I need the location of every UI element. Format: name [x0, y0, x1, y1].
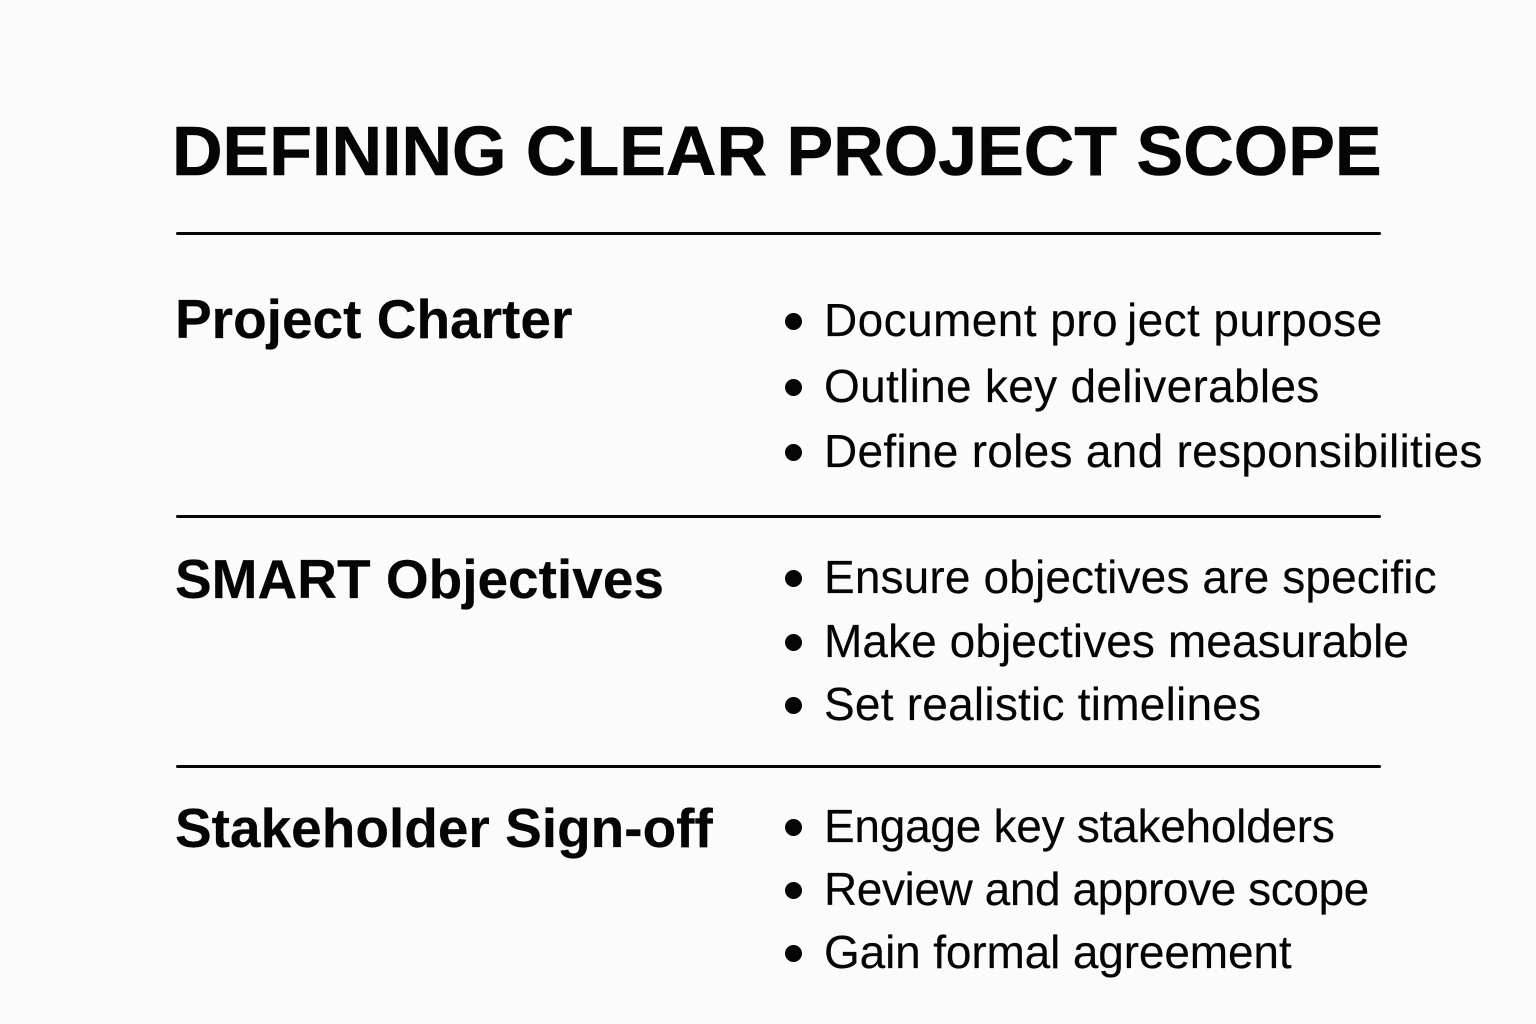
list: Stakeholder Sign-off: Review and approve scope	[824, 863, 1369, 915]
list: SMART Objectives	[785, 551, 1437, 730]
list: SMART Objectives: Set realistic timelines	[824, 678, 1261, 730]
list: Project Charter: Document project purpose	[824, 294, 1383, 346]
list: SMART Objectives: Make objectives measurable	[824, 615, 1409, 667]
list: SMART Objectives: Ensure objectives are specific	[824, 551, 1437, 603]
heading: Stakeholder Sign-off: Stakeholder Sign-off	[175, 797, 713, 859]
list: Project Charter: Define roles and responsibilities	[824, 425, 1483, 477]
heading: SMART Objectives: SMART Objectives	[175, 548, 664, 610]
heading: Project Charter: Project Charter	[175, 288, 572, 350]
list: Stakeholder Sign-off: Gain formal agreement	[824, 926, 1292, 978]
title: DEFINING CLEAR PROJECT SCOPE	[172, 112, 1382, 190]
list: Project Charter: Outline key deliverables	[824, 360, 1320, 412]
list: Project Charter	[785, 294, 1483, 477]
list: Stakeholder Sign-off: Engage key stakeholders	[824, 800, 1335, 852]
list: Stakeholder Sign-off	[785, 800, 1369, 978]
